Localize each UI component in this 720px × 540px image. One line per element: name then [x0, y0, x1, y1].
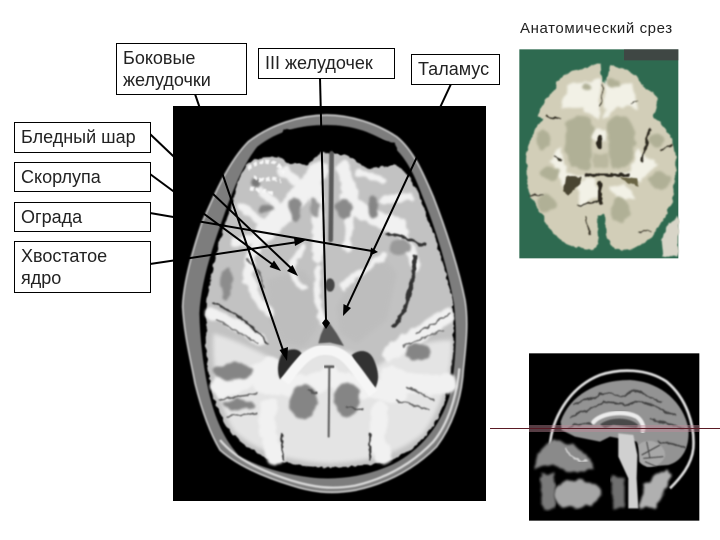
arrow: lateral ventricles [195, 94, 288, 361]
slice white matter [550, 78, 657, 207]
spine [612, 475, 625, 508]
corpus callosum [593, 413, 643, 431]
frontal black CSF [280, 127, 397, 168]
pointer lines and arrowheads [150, 78, 451, 361]
neck muscles [640, 468, 672, 508]
deep grey nuclei [267, 257, 397, 347]
label: lateral ventricles [116, 43, 247, 95]
brain slice [527, 63, 676, 250]
orbit detail [565, 448, 588, 460]
label: thalamus: Таламус [418, 59, 489, 79]
brain hemisphere [561, 380, 689, 467]
label: caudate nucleus: ядро [21, 268, 61, 288]
midline fissure [325, 153, 333, 437]
neighbouring tissue fragment [662, 217, 678, 257]
label: third ventricle [258, 48, 395, 79]
cerebellar folia [642, 442, 663, 467]
tongue and jaw [554, 480, 602, 508]
splenium arch [285, 350, 373, 393]
label: caudate nucleus: Хвостатое [21, 246, 107, 266]
temporal horns [563, 177, 582, 197]
slice dark clefts [530, 85, 673, 235]
label: putamen [14, 162, 151, 192]
lateral ventricle [600, 419, 638, 428]
anatomical section photo [519, 49, 678, 258]
brainstem [618, 433, 638, 508]
skull ring [183, 115, 467, 492]
CSF gap [199, 125, 456, 478]
label: claustrum: Ограда [21, 207, 82, 227]
label: globus pallidus: Бледный шар [21, 127, 136, 147]
bright frontal gyri [248, 162, 285, 193]
label: caudate nucleus [14, 241, 151, 293]
cerebellum [638, 441, 665, 467]
sulci [213, 234, 450, 460]
lateral ventricle left [278, 349, 302, 379]
slice deep nuclei [537, 79, 670, 222]
sagittal MRI scan [529, 353, 699, 521]
sagittal gyri [568, 391, 685, 448]
scalp and neck [550, 371, 694, 488]
cavum [325, 278, 335, 292]
arrow: putamen [150, 174, 281, 271]
skull bright lines [220, 368, 459, 488]
upper airway [590, 443, 605, 460]
corner strip [624, 49, 678, 60]
quadrigeminal cistern [318, 320, 344, 346]
axial MRI scan [173, 106, 486, 501]
label: lateral ventricles: Боковые [123, 48, 195, 68]
caption: anatomical section: Анатомический срез [520, 20, 673, 37]
nasal and facial tissue [533, 440, 593, 473]
arrow: third ventricle [320, 78, 330, 329]
cortical grey patches [214, 179, 431, 418]
label: lateral ventricles: желудочки [123, 70, 211, 90]
label: thalamus [411, 54, 500, 85]
white matter tracts [210, 168, 447, 457]
label: claustrum [14, 202, 151, 232]
lateral ventricle right [352, 351, 378, 388]
label: third ventricle: III желудочек [265, 53, 373, 73]
arrow: claustrum [150, 213, 378, 256]
arrow: caudate nucleus [150, 238, 306, 264]
arrow: thalamus [343, 84, 451, 316]
label: putamen: Скорлупа [21, 167, 101, 187]
slice level line [490, 425, 720, 432]
arrow: globus pallidus [150, 134, 298, 276]
brain tissue [206, 150, 454, 467]
label: globus pallidus [14, 122, 151, 153]
posterior white matter field [213, 333, 452, 463]
